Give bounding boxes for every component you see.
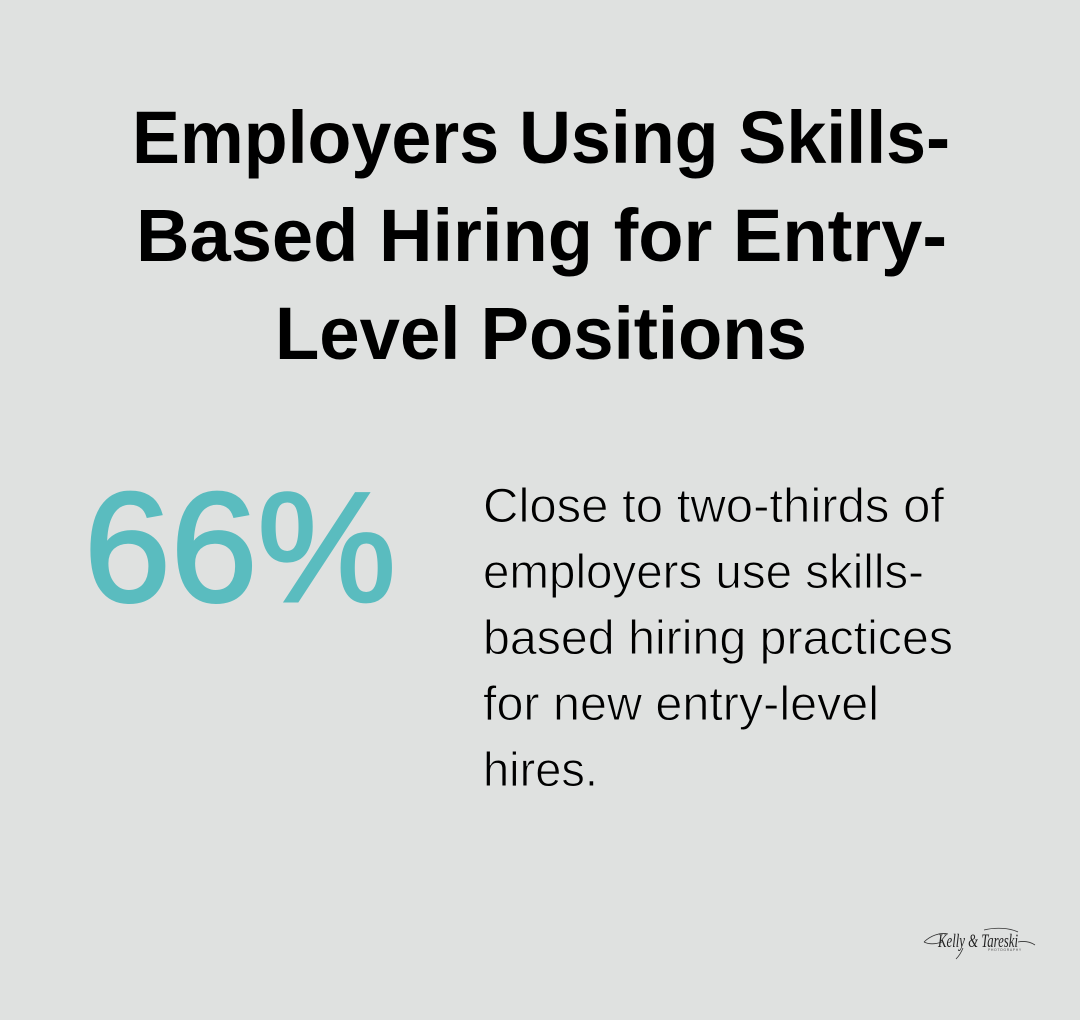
description text: Close to two-thirds of [483,480,945,533]
title: Employers Using Skills- [132,96,950,179]
title [132,96,950,375]
description text [483,480,953,797]
photographer signature logo: PHOTOGRAPHY [988,948,1022,952]
description text: based hiring practices [483,612,953,665]
description text: hires. [483,744,598,797]
title: Level Positions [275,292,807,375]
description text: employers use skills- [483,546,924,599]
title: Based Hiring for Entry- [136,194,947,277]
big statistic: 66%: 66% [84,461,396,635]
photographer signature logo: Kelly & Tareski [937,931,1018,952]
description text: for new entry-level [483,678,879,731]
photographer signature logo [924,928,1035,959]
